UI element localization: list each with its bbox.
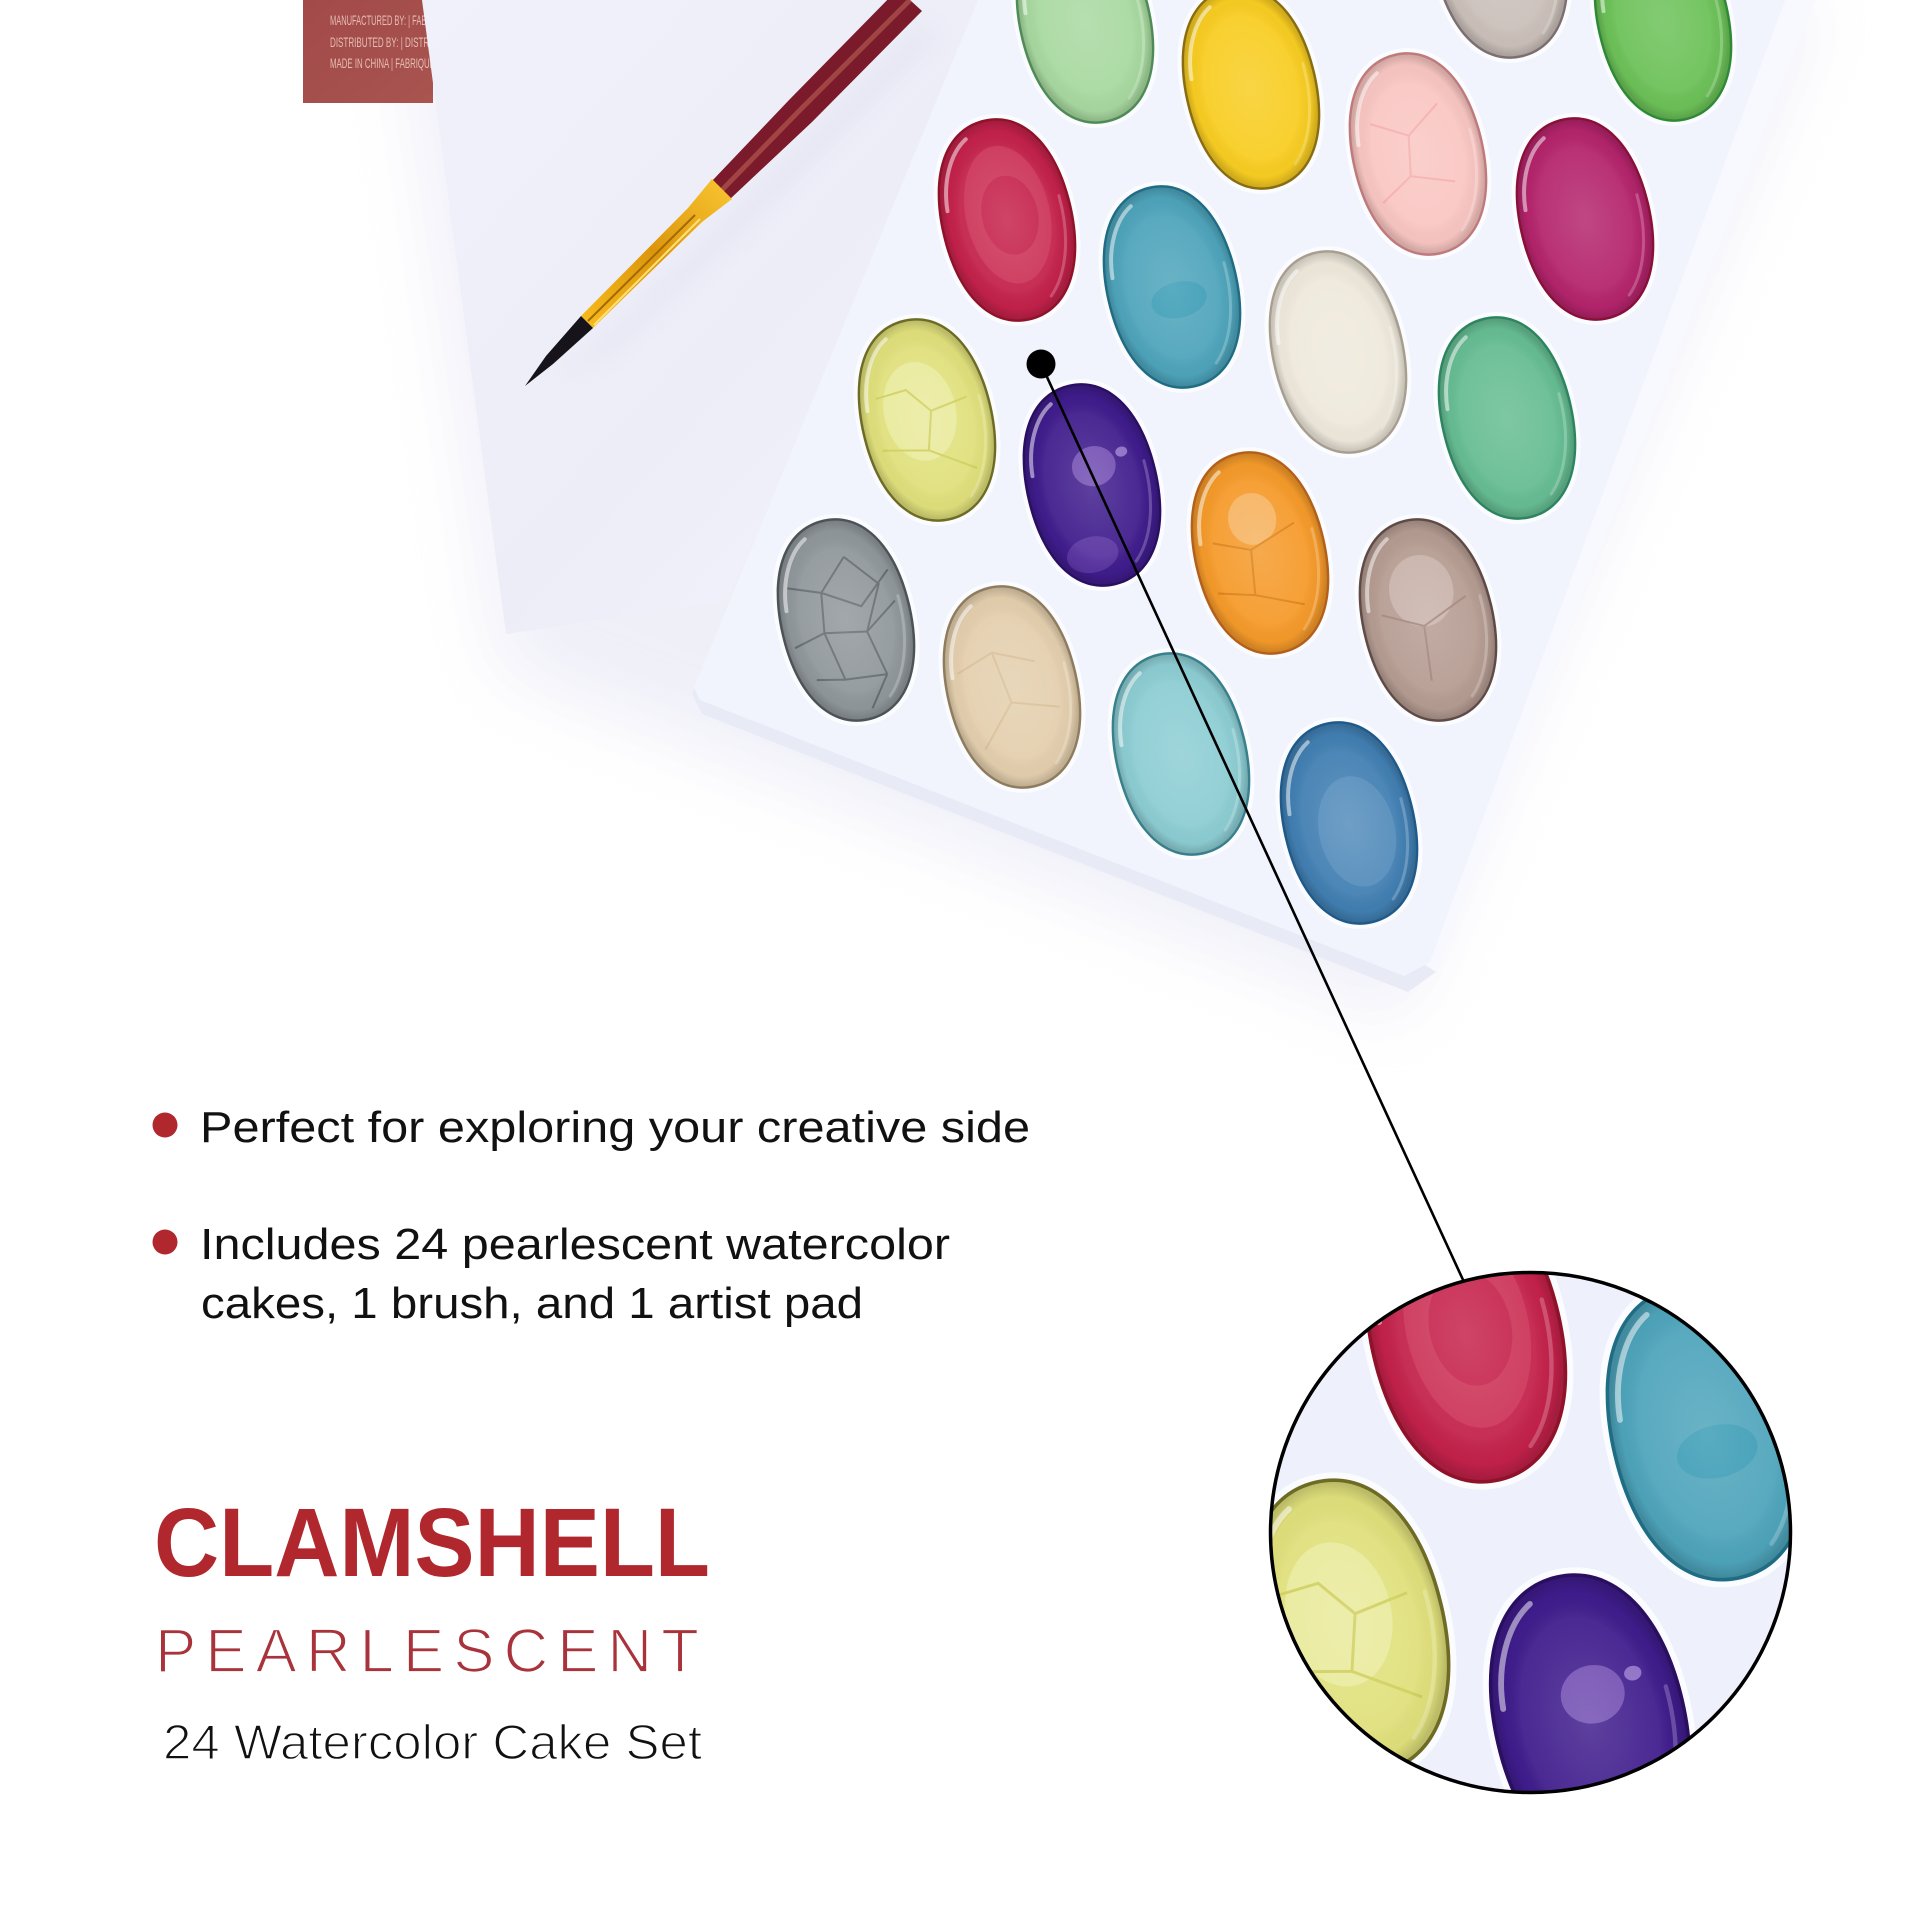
cake: red (915, 100, 1099, 340)
watercolor tray (692, 0, 1815, 992)
descriptor: set size: 24 Watercolor Cake Set (163, 1716, 702, 1770)
product label behind pad: MANUFACTURED BY: | FABRIQUÉ (330, 12, 450, 28)
cake: purple (1000, 365, 1184, 605)
magnified teal cake (1600, 1298, 1789, 1588)
brush handle (711, 0, 922, 200)
brush ferrule (581, 179, 732, 328)
magnified red cake (1362, 1274, 1573, 1490)
product label behind pad (303, 0, 450, 103)
pointer line with dot (1026, 350, 1464, 1282)
title: clamshell: CLAMSHELL (154, 1488, 710, 1597)
brush bristles (525, 316, 593, 386)
soft shadows (400, 0, 1820, 1020)
cake: pink (1326, 34, 1510, 274)
bullet: set contents (152, 1220, 950, 1328)
bullet: creative side: Perfect for exploring your creative side (200, 1103, 1030, 1152)
cake: blue (1257, 703, 1441, 943)
cake: grey (754, 500, 938, 740)
magnified purple cake (1483, 1568, 1696, 1791)
cake: pale yellow (835, 300, 1019, 540)
cake: yellow (1159, 0, 1343, 208)
cake: aqua (1089, 634, 1273, 874)
product label behind pad: MADE IN CHINA | FABRIQUÉ EN (330, 55, 448, 71)
title block (154, 1488, 710, 1770)
magnified yellow cake (1272, 1472, 1456, 1764)
cake: green (1571, 0, 1755, 140)
cake: sea green (1415, 298, 1599, 538)
bullet: set contents: Includes 24 pearlescent watercolor (200, 1220, 950, 1269)
cake: cream (1246, 232, 1430, 472)
magnified detail circle (1268, 1270, 1792, 1794)
cake: tan (920, 567, 1104, 807)
artist pad (422, 0, 1000, 634)
bullet: set contents: cakes, 1 brush, and 1 artist pad (201, 1279, 863, 1328)
subtitle: pearlescent: PEARLESCENT (155, 1617, 699, 1686)
cake: orange (1168, 433, 1352, 673)
cake: magenta (1493, 99, 1677, 339)
paintbrush (525, 0, 935, 386)
cake: light green (993, 0, 1177, 142)
cake: taupe (1336, 500, 1520, 740)
product label behind pad: DISTRIBUTED BY: | DISTRIBUÉ (330, 34, 448, 50)
cake: taupe top (1407, 0, 1591, 77)
cake: teal (1080, 167, 1264, 407)
